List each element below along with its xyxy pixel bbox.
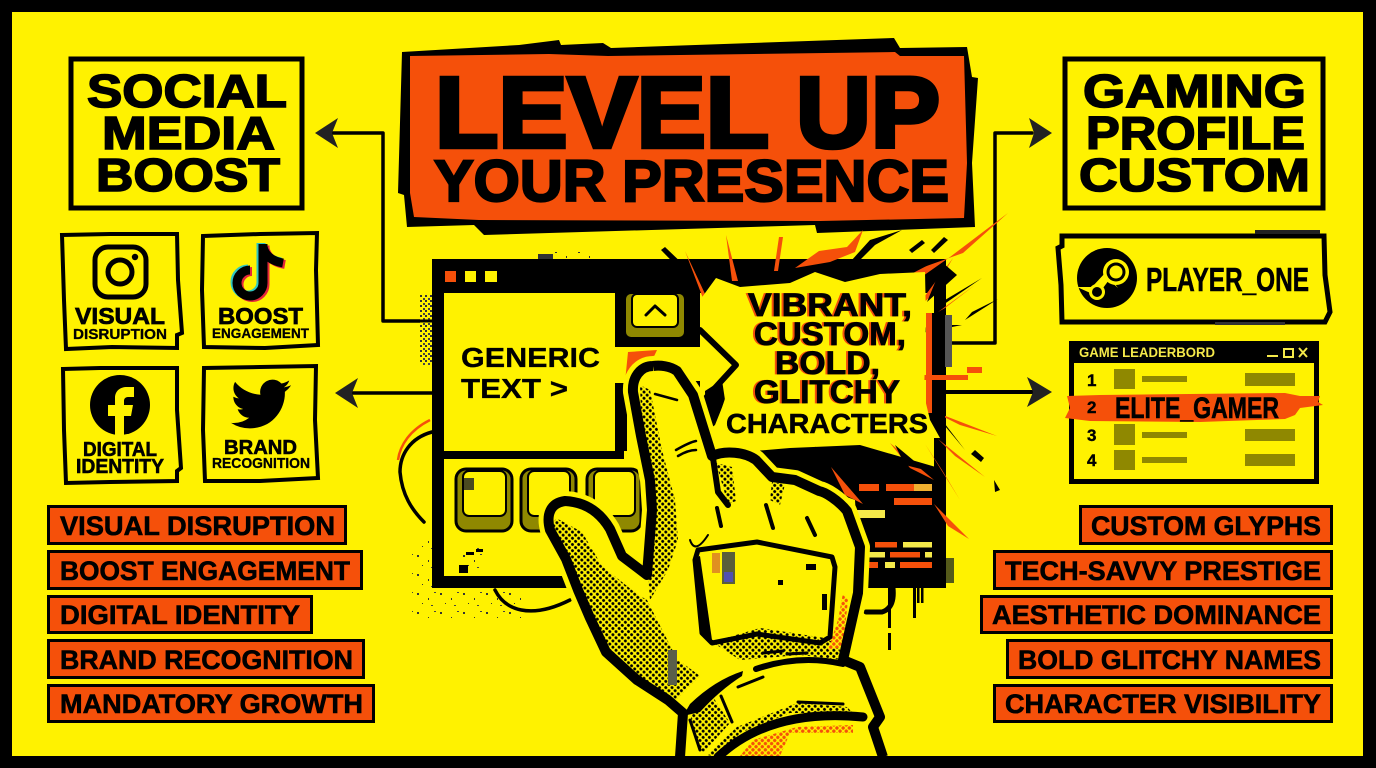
highlighted elite gamer row: 2 xyxy=(1087,398,1096,417)
heading: gaming profile custom: PROFILE xyxy=(1086,107,1305,159)
callout burst: vibrant custom bold glitchy characters xyxy=(661,213,1008,539)
glitch bars beside screen xyxy=(615,350,725,451)
icon: steam xyxy=(1077,248,1137,308)
decorative glitch noise around window xyxy=(398,252,594,618)
icon card: digital identity: DIGITAL xyxy=(83,439,157,461)
icon card: boost engagement: BOOST xyxy=(218,303,303,329)
player one name: PLAYER_ONE xyxy=(1146,261,1309,298)
leaderboard rows xyxy=(1087,369,1295,470)
leaderboard rows: 1 xyxy=(1087,371,1096,390)
burst right border xyxy=(920,313,982,431)
label: custom glyphs: CUSTOM GLYPHS xyxy=(1091,511,1321,541)
icon card: brand recognition: RECOGNITION xyxy=(212,455,310,472)
title line 2: YOUR PRESENCE xyxy=(434,149,949,214)
callout text: GLITCHY xyxy=(754,374,900,410)
label: digital identity: DIGITAL IDENTITY xyxy=(60,600,300,630)
generic text: TEXT > xyxy=(461,373,568,404)
callout text: BOLD, xyxy=(773,345,878,381)
title line 1: LEVEL UP xyxy=(435,57,940,169)
heading: social media boost: SOCIAL xyxy=(87,65,287,117)
icon card: digital identity: IDENTITY xyxy=(76,456,165,478)
callout text: CHARACTERS xyxy=(726,408,928,439)
leaderboard window xyxy=(1065,341,1323,482)
cuff lines xyxy=(683,651,863,757)
hand yellow halo xyxy=(549,366,883,752)
callout text: GLITCHY xyxy=(752,374,898,410)
window buttons xyxy=(445,271,497,282)
callout text: VIBRANT, xyxy=(746,287,910,323)
icon: instagram xyxy=(95,247,146,297)
finger creases xyxy=(655,394,815,546)
callout text: VIBRANT, xyxy=(748,287,912,323)
icon: facebook xyxy=(90,375,150,435)
burst spikes xyxy=(661,213,1008,539)
callout text xyxy=(726,287,928,439)
title banner xyxy=(398,38,978,235)
damage in window corner xyxy=(459,548,486,573)
arrow: window to social icons xyxy=(335,378,432,408)
glove back patch xyxy=(694,542,835,643)
heading: gaming profile custom xyxy=(1065,59,1323,208)
illustration: gloved hand pressing key xyxy=(549,366,883,757)
arrow: window to gaming profile custom xyxy=(948,118,1052,343)
label list: gaming benefits xyxy=(982,506,1332,722)
generic text: GENERIC xyxy=(461,342,600,373)
generic text xyxy=(461,342,600,404)
screen divider xyxy=(444,451,624,459)
window controls xyxy=(1267,348,1307,357)
icon card: digital identity xyxy=(63,368,181,483)
icon card: visual disruption: DISRUPTION xyxy=(73,326,167,343)
leaderboard rows: 3 xyxy=(1087,426,1096,445)
label: visual disruption: VISUAL DISRUPTION xyxy=(60,511,335,541)
icon: tiktok note xyxy=(235,243,285,298)
label: aesthetic dominance: AESTHETIC DOMINANCE xyxy=(992,600,1321,630)
lower right black glitch block xyxy=(730,445,946,588)
label list: social benefits xyxy=(48,506,374,722)
browser window xyxy=(432,259,954,650)
icon: twitter bird xyxy=(231,380,291,428)
arrow: window to social media boost xyxy=(315,118,432,321)
label: character visibility: CHARACTER VISIBILITY xyxy=(1005,689,1321,719)
highlighted elite gamer row: ELITE_GAMER xyxy=(1115,392,1279,425)
callout notch outline xyxy=(700,330,736,400)
heading: gaming profile custom: CUSTOM xyxy=(1079,149,1310,201)
icon card: brand recognition: BRAND xyxy=(224,436,297,459)
icon card: boost engagement: ENGAGEMENT xyxy=(212,325,309,341)
label: boost engagement: BOOST ENGAGEMENT xyxy=(60,556,350,586)
bottom frame edge xyxy=(0,756,1376,768)
glitch strip on wrist xyxy=(668,650,677,685)
steam player card xyxy=(1058,230,1330,325)
label: mandatory growth: MANDATORY GROWTH xyxy=(60,689,363,719)
callout text: CUSTOM, xyxy=(754,316,906,352)
callout text: CUSTOM, xyxy=(752,316,904,352)
label: bold glitchy names: BOLD GLITCHY NAMES xyxy=(1018,645,1321,675)
icon card: boost engagement xyxy=(202,233,318,348)
halftone shading xyxy=(550,385,853,757)
arrow: window to leaderboard xyxy=(946,377,1052,407)
burst yellow body xyxy=(700,272,940,448)
icon card: visual disruption xyxy=(62,234,182,349)
heading: social media boost: BOOST xyxy=(96,149,280,201)
heading: social media boost xyxy=(71,59,302,208)
icon card: brand recognition xyxy=(203,366,318,481)
label: tech-savvy prestige: TECH-SAVVY PRESTIGE xyxy=(1005,556,1321,586)
leaderboard rows: 4 xyxy=(1087,451,1097,470)
callout text: BOLD, xyxy=(775,345,880,381)
up arrow key block xyxy=(615,292,700,347)
label: brand recognition: BRAND RECOGNITION xyxy=(60,645,353,675)
icon card: visual disruption: VISUAL xyxy=(75,303,165,329)
heading: social media boost: MEDIA xyxy=(102,107,275,159)
leaderboard title: GAME LEADERBORD xyxy=(1079,344,1215,360)
paint drips xyxy=(866,558,954,650)
heading: gaming profile custom: GAMING xyxy=(1083,65,1306,117)
hand outline xyxy=(549,366,883,757)
keyboard keys xyxy=(456,469,641,531)
